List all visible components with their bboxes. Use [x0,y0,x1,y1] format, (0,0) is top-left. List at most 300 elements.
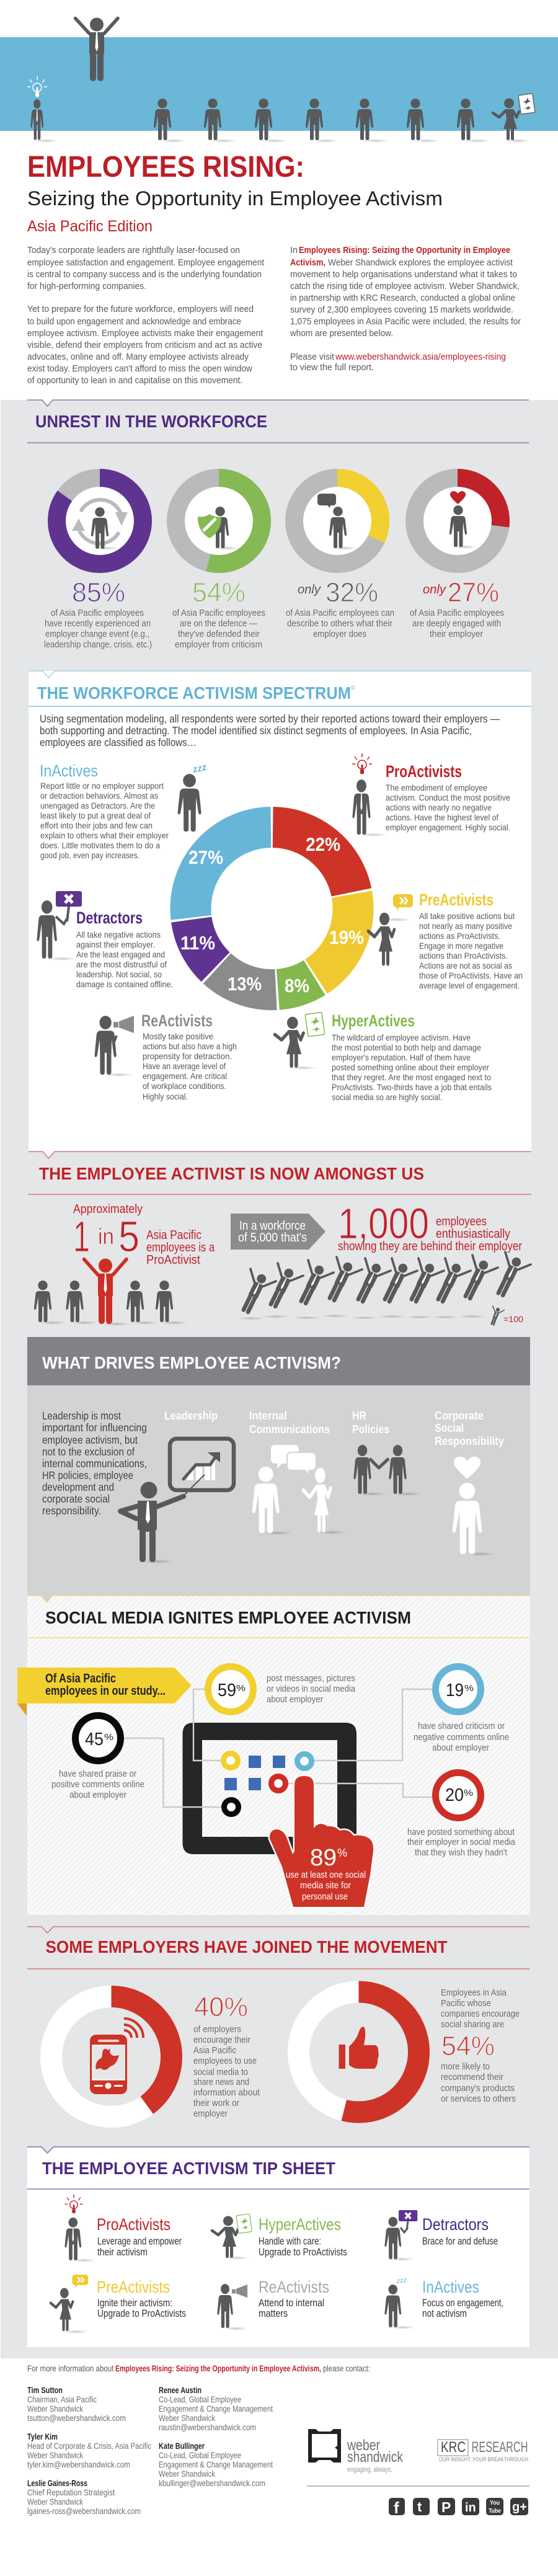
figure: hyperactive with sheet [493,94,535,140]
stat: 1 in 5: ProActivist [146,1253,200,1267]
intro paragraph: both supporting and detracting. The model identified six distinct segments of employees. In Asia Pacific, [40,724,472,737]
tip: proactivists: their activism [97,2246,148,2258]
footer: contacts column 1: Chairman, Asia Pacific [27,2394,97,2404]
caption: 32%: describe to others what their [287,619,392,629]
caption: 32%: employer does [313,629,366,639]
segment: preactivists [368,890,523,990]
explanatory text: HR policies, employee [42,1469,133,1481]
caption: 45%: about employer [69,1790,126,1800]
intro text: right column: catch the rising tide of employee activism. Weber Shandwick, [290,281,520,291]
donut percentages: 13% [228,973,262,995]
stat: only 32% [298,577,378,608]
figure: proactivist with light bulb [27,76,47,140]
segment: detractors: damage is contained offline. [76,979,173,989]
intro text: right column: Please visit [290,352,335,362]
icon: pointing hand with 89%: % [337,1847,347,1859]
legend: one figure equals 100 [487,1306,523,1326]
segment: reactivists [95,1011,237,1101]
segment: inactives: does. Little motivates them to do a [40,840,160,850]
donut percentages: 22% [306,833,340,855]
panel: employee activism tip sheet [27,2147,529,2347]
segment: hyperactives: that they regret. Are the most engaged next to [332,1072,491,1082]
panel: workforce activism spectrum [29,671,531,1152]
footer: contacts column 1: Tim Sutton [27,2385,63,2395]
segment: preactivists: Actions are not as social as [419,961,512,970]
legend: one figure equals 100: =100 [503,1314,523,1324]
stat: 40%: 40% [194,1992,248,2022]
caption: 45%: positive comments online [51,1780,144,1790]
caption: 85% [44,608,152,650]
caption: 40%: employees to use [193,2056,257,2066]
footer: contacts column 2: kbullinger@webershandwick.com [159,2478,265,2488]
segment: preactivists: Engage in more negative [419,941,503,951]
ring: 19%: % [464,1683,474,1694]
icon: presentation board [170,1439,234,1490]
caption: 20%: that they wish they hadn't [415,1848,507,1858]
footer: contacts column 1: Leslie Gaines-Ross [27,2478,87,2488]
footer: contacts column 2: Co-Lead, Global Employee [159,2394,241,2404]
segment: proactivists: actions with nearly no negative [386,802,492,812]
text: recommendation stat: recommend their [441,2072,503,2082]
intro paragraph: employees are classified as follows… [40,736,197,748]
text: recommendation stat: more likely to [441,2061,490,2072]
heading: THE EMPLOYEE ACTIVISM TIP SHEET [42,2159,335,2178]
icon: speech bubbles and people [252,1445,347,1535]
footer: contacts column 1: tsutton@webershandwick.com [27,2413,126,2423]
banner: of asia pacific employees [17,1668,192,1716]
stat: 1 in 5: 5 [118,1212,140,1261]
arrow: in a workforce of 5,000 [231,1214,326,1250]
donut: 40% of employers [51,1997,171,2117]
caption: 40%: information about [193,2087,260,2098]
heading: THE WORKFORCE ACTIVISM SPECTRUM [37,683,351,703]
intro text: right column: movement to help organisations understand what it takes to [290,269,517,280]
driver: corporate social responsibility: Social [435,1422,464,1434]
tablet app icons [223,1754,311,1814]
caption: 45%: have shared praise or [59,1769,136,1779]
driver: leadership: Leadership [164,1410,218,1422]
footer: contacts column 1: Weber Shandwick [27,2497,84,2507]
ring: 20%: 20 [445,1785,464,1805]
caption: 20%: their employer in social media [407,1837,516,1847]
donut: 54% [176,477,262,564]
tip: preactivists: Ignite their activism: [97,2297,172,2309]
panel: some employers have joined the movement [27,1927,529,2119]
footer: contacts column 2: Kate Bullinger [159,2441,205,2451]
ring: 19%: 19 [446,1681,464,1700]
driver: corporate social responsibility: Responsibility [435,1435,504,1447]
text: recommendation stat: company's products [441,2083,515,2094]
heading: SOME EMPLOYERS HAVE JOINED THE MOVEMENT [46,1937,448,1956]
segment: hyperactives: social media so are highly social. [332,1092,442,1102]
segment: inactives: InActives [40,762,98,780]
segment: proactivists: ProActivists [386,762,462,781]
figure: rising employee [76,17,118,78]
stat: 1 in 5 [73,1202,215,1267]
footer: contacts column 2: Co-Lead, Global Employee [159,2450,241,2460]
stat: 1 in 5: employees is a [146,1241,215,1255]
tip: hyperactives: HyperActives [259,2215,341,2234]
icon: thumbs up [339,2027,379,2069]
segment: reactivists: Highly social. [143,1091,188,1101]
segment: preactivists: those of ProActivists. Have an [419,970,523,980]
segment: detractors: against their employer. [76,939,155,949]
footer: contacts column 1: Tyler Kim [27,2432,58,2441]
caption: 27% [410,608,504,639]
explanatory text [42,1410,147,1517]
segment: inactives: or detraction behaviors. Almost as [40,791,158,801]
ring: 45%: % [104,1732,113,1743]
tip: inactives: InActives [422,2278,479,2296]
caption: 32% [286,608,394,639]
caption: 59%: about employer [267,1695,323,1705]
gray page background [1,400,558,2358]
text: recommendation stat [441,1988,520,2104]
segment: inactives: unengaged as Detractors. Are the [40,801,155,811]
segment: inactives [40,762,208,860]
segment: detractors: leadership. Not social, so [76,969,162,979]
intro text: right column: www.webershandwick.asia/employees-rising [335,352,506,362]
footer: contacts column 1 [27,2385,151,2516]
tip: preactivists [51,2275,186,2334]
social media icons: Tube [489,2508,501,2515]
social media icons: g+ [512,2500,527,2514]
stat: only 27% [423,577,499,608]
intro text: left column: employee satisfaction and engagement. Employee engagement [27,257,265,268]
footer: contacts column 1: Chief Reputation Strategist [27,2487,115,2497]
banner: of asia pacific employees: Of Asia Pacific [45,1672,116,1686]
tip: proactivists: ProActivists [97,2215,170,2234]
caption: 59% [267,1674,356,1705]
stat: 1,000 employees: enthusiastically [436,1227,510,1241]
caption: 54%: of Asia Pacific employees [172,608,265,618]
text: recommendation stat: social sharing are [441,2019,504,2030]
ring: 59% [208,1667,253,1712]
segment: reactivists: Mostly take positive [143,1031,213,1041]
ring: 19% [435,1667,481,1712]
stat: 1 in 5: Approximately [73,1202,143,1216]
tip: reactivists [217,2278,329,2330]
segment: inactives: least likely to put a great deal of [40,811,151,820]
intro text: right column: Employees Rising: Seizing the Opportunity in Employee [299,245,510,255]
caption: 40%: of employers [193,2024,241,2035]
intro text: left column: for high-performing companies. [27,281,146,291]
icon: pointing hand with 89%: personal use [302,1891,348,1902]
icon: pointing hand with 89%: use at least one social [286,1870,366,1880]
intro text: left column: exist today. Employers can't afford to miss the open window [27,363,252,374]
icon: sleeping man: zzz [191,762,208,775]
footer: contacts column 2: raustin@webershandwick.com [159,2422,256,2432]
text: recommendation stat: Pacific whose [441,1998,491,2009]
logo: weber shandwick [308,2429,404,2474]
intro text: left column: to build upon engagement and acknowledge and embrace [27,316,241,327]
segment: preactivists: actions as ProActivists. [419,931,500,941]
footer: contact line: please contact: [323,2363,370,2373]
segment: reactivists: engagement. Are critical [143,1071,227,1081]
stat: 1 in 5: 1 [73,1212,90,1261]
segment: detractors: All take negative actions [76,930,161,939]
explanatory text: internal communications, [42,1457,147,1470]
intro text: left column: employee activism. Employee activists make their engagement [27,328,264,339]
icon: pointing hand with 89% [270,1776,373,1907]
donut percentages: 11% [180,932,215,954]
donut percentages: 19% [329,926,364,948]
segment: preactivists: PreActivists [419,890,494,909]
arrow: in a workforce of 5,000: of 5,000 that's [238,1231,307,1245]
driver: hr policies [352,1410,422,1496]
intro text: right column: to view the full report. [290,362,374,373]
segment: preactivists: average level of engagement. [419,980,520,990]
segment: preactivists: All take positive actions but [419,911,515,921]
caption: 54%: they've defended their [178,629,260,639]
segment: hyperactives: employer's reputation. Half of them have [332,1052,471,1062]
text: recommendation stat: companies encourage [441,2009,520,2019]
caption: 32%: of Asia Pacific employees can [286,608,394,618]
heading: © [351,685,355,691]
text: recommendation stat: 54% [441,2031,495,2061]
intro text: right column [290,245,521,373]
footer: contacts column 2: Weber Shandwick [159,2413,216,2423]
caption: 45% [51,1769,144,1800]
driver: internal communications [249,1410,347,1535]
footer: contact line: Employees Rising: Seizing the Opportunity in Employee Activism, [115,2363,321,2373]
caption: 27%: of Asia Pacific employees [410,608,504,618]
intro paragraph: Using segmentation modeling, all respondents were sorted by their reported actions toward their employers — [40,713,500,725]
heading: THE EMPLOYEE ACTIVIST IS NOW AMONGST US [39,1164,424,1183]
stat: 1,000 employees: employees [436,1215,487,1228]
footer: contacts column 1: tyler.kim@webershandwick.com [27,2459,130,2469]
caption: 27%: are deeply engaged with [412,619,501,629]
driver: hr policies: Policies [352,1423,389,1436]
heading: SOCIAL MEDIA IGNITES EMPLOYEE ACTIVISM [45,1608,411,1627]
social media icons: You [490,2500,500,2507]
row of employees [154,99,474,140]
segment: inactives: good job, even pay increases. [40,850,140,860]
social media icons: t [417,2499,422,2515]
driver: corporate social responsibility: Corporate [435,1410,484,1422]
heading: WHAT DRIVES EMPLOYEE ACTIVISM? [42,1353,341,1372]
segment: proactivists: actions. Have the highest level of [386,812,498,822]
caption: 59%: or videos in social media [267,1684,356,1694]
tip: reactivists: ReActivists [259,2278,329,2296]
stat: 85%: 85% [72,577,125,608]
intro text: left column: visible, defend their employers from criticism and act as active [27,340,262,350]
panel: what drives employee activism [27,1337,530,1596]
donut: 54% more likely [299,1992,419,2112]
tip: detractors: Detractors [422,2215,489,2234]
icon: man with bulb [352,753,388,837]
icon: pointing hand with 89%: 89 [310,1845,337,1871]
title [27,151,443,235]
segment: hyperactives: the most potential to both help and damage [332,1042,481,1052]
stat: 1 in 5: Asia Pacific [146,1228,202,1242]
segment: inactives: explain to others what their employer [40,830,169,840]
icon: woman with speech bubble [368,894,413,966]
explanatory text: development and [42,1481,114,1493]
caption: 40%: employer [193,2108,228,2119]
caption: 40%: encourage their [193,2035,250,2045]
explanatory text: not to the exclusion of [42,1446,135,1458]
donut chart: six segments [191,827,353,990]
ring: 45%: 45 [85,1730,104,1749]
connector lines [125,1689,432,1807]
stat: only 32%: 32% [326,577,378,608]
donut: 85% [57,477,143,564]
driver: leadership [120,1410,234,1563]
segment: inactives: effort into their jobs and few can [40,820,153,830]
footer: contacts column 1: Weber Shandwick [27,2404,84,2414]
title: EMPLOYEES RISING: [27,151,304,184]
intro text: right column: whom are presented below. [290,328,393,339]
stat: 54%: 54% [192,577,246,608]
icon: sleeping man [178,762,208,832]
social media icons: P [441,2499,451,2515]
caption: 59%: post messages, pictures [267,1674,355,1684]
segment: hyperactives: ProActivists. Two-thirds have a job that entails [332,1082,492,1092]
explanatory text: important for influencing [42,1421,147,1434]
segment: proactivists: activism. Conduct the most positive [386,793,510,802]
tip: inactives [384,2276,503,2329]
caption: 19%: negative comments online [414,1733,509,1743]
footer: contact line: For more information about [27,2363,114,2373]
ring: 20%: % [464,1788,473,1798]
footer: contacts column 2: Engagement & Change Management [159,2459,273,2469]
donut percentages: 27% [188,846,223,868]
driver: internal communications: Internal [249,1410,287,1422]
ring: 59%: % [236,1683,246,1694]
logo: weber shandwick: shandwick [347,2449,404,2466]
driver: corporate social responsibility [435,1410,504,1556]
logo: krc research: RESEARCH [471,2439,528,2456]
footer: contacts column 1: Head of Corporate & Crisis, Asia Pacific [27,2441,151,2451]
ring: 59%: 59 [218,1681,236,1700]
donut percentages: 8% [285,975,309,997]
tablet [182,1723,356,1854]
logo: krc research: OUR INSIGHT. YOUR BREAKTHROUGH. [439,2456,529,2463]
driver: internal communications: Communications [249,1423,330,1436]
explanatory text: responsibility. [42,1504,101,1517]
edition: Asia Pacific Edition [27,218,153,235]
social media icons [389,2498,528,2517]
tip: hyperactives: Handle with care: [259,2235,321,2247]
subtitle: Seizing the Opportunity in Employee Activism [27,187,443,210]
intro text: right column: Weber Shandwick explores the employee activist [328,257,513,268]
intro text: right column: In [290,245,298,255]
tip: hyperactives [212,2214,347,2260]
intro text: left column: is central to company success and is the underlying foundation [27,269,262,280]
segment: reactivists: ReActivists [141,1011,213,1030]
intro text: left column: advocates, online and off. Many employee activists already [27,352,249,362]
intro text: left column: Yet to prepare for the future workforce, employers will need [27,304,254,314]
caption: 19% [414,1721,509,1753]
segment: reactivists: of workplace conditions. [143,1081,226,1091]
tip: inactives: Focus on engagement, [422,2297,503,2309]
explanatory text: employee activism, but [42,1434,138,1446]
caption: 19%: about employer [432,1743,489,1753]
footer: contacts column 2: Weber Shandwick [159,2469,216,2479]
caption: 19%: have shared criticism or [418,1721,505,1731]
segment: hyperactives: The wildcard of employee activism. Have [332,1033,471,1042]
intro paragraph [40,713,500,748]
footer: contacts column 2: Engagement & Change Management [159,2404,273,2414]
segment: detractors: are the most distrustful of [76,959,167,969]
tip: preactivists: Upgrade to ProActivists [97,2307,186,2319]
stat: 1 in 5: in [98,1224,114,1249]
tip: inactives: zzz [396,2276,407,2285]
tip: hyperactives: Upgrade to ProActivists [259,2246,347,2258]
caption: 20%: have posted something about [407,1828,515,1837]
figures: ten jumping employees [233,1251,531,1320]
segment: hyperactives: posted something online about their employer [332,1062,489,1072]
segment: preactivists: not nearly as many positive [419,921,512,931]
caption: 20% [407,1828,516,1858]
caption: 54%: employer from criticism [175,640,262,650]
intro text: left column [27,245,265,386]
stat: only 27%: 27% [448,577,499,608]
stat: 1,000 employees: 1,000 [338,1199,429,1248]
heading: UNREST IN THE WORKFORCE [35,412,267,431]
icon: person with heart [453,1457,495,1556]
logo: weber shandwick: weber [347,2437,380,2454]
segment: preactivists: actions than ProActivists. [419,951,508,961]
intro text: right column: survey of 2,300 employees covering 15 markets worldwide. [290,304,513,315]
icon: smartphone [90,2019,143,2094]
intro text: right column: 1,075 employees in Asia Pacific were included, the results for [290,316,521,327]
divider rule [307,2485,529,2487]
icon: man with megaphone [95,1016,134,1077]
segment: reactivists: Have an average level of [143,1061,226,1071]
stat: only 27%: only [423,583,446,597]
tip: inactives: not activism [422,2307,467,2319]
tip: proactivists: Leverage and empower [97,2235,182,2247]
figures: one in five [34,1259,188,1326]
caption: 85%: of Asia Pacific employees [51,608,144,618]
tip: detractors [384,2210,498,2261]
caption: 54%: are on the defence — [180,619,257,629]
stat: only 32%: only [298,583,321,597]
donut percentages [180,833,364,997]
tip: reactivists: Attend to internal [259,2297,324,2309]
footer: contacts column 2 [159,2385,273,2488]
stat: 1,000 employees [338,1199,522,1253]
icon: pointing hand with 89%: media site for [300,1880,351,1891]
caption: 40%: Asia Pacific [193,2045,236,2056]
caption: 40% [193,2024,260,2119]
explanatory text: corporate social [42,1493,110,1505]
footer: contacts column 2: Renee Austin [159,2385,202,2395]
arrow: in a workforce of 5,000: In a workforce [239,1219,306,1233]
tip: detractors: Brace for and defuse [422,2235,498,2247]
caption: 85%: leadership change, crisis, etc.) [44,640,152,650]
driver: hr policies: HR [352,1410,366,1422]
donut: 27% [414,477,501,564]
tip: proactivists [64,2195,182,2262]
icon: handshake [353,1445,422,1496]
ring: 45% [76,1715,120,1761]
header band [0,17,558,143]
icon: presenter [120,1475,205,1563]
intro text: left column: Today's corporate leaders are rightfully laser-focused on [27,245,240,255]
segment: hyperactives: HyperActives [332,1011,415,1030]
explanatory text: Leadership is most [42,1410,121,1422]
caption: 85%: employer change event (e.g., [45,629,149,639]
caption: 40%: share news and [193,2077,249,2087]
caption: 54% [172,608,265,650]
text: recommendation stat: or services to others [441,2094,516,2104]
caption: 40%: social media to [193,2067,248,2077]
intro text: right column: Activism, [290,257,326,268]
panel: unrest in the workforce [27,400,529,650]
